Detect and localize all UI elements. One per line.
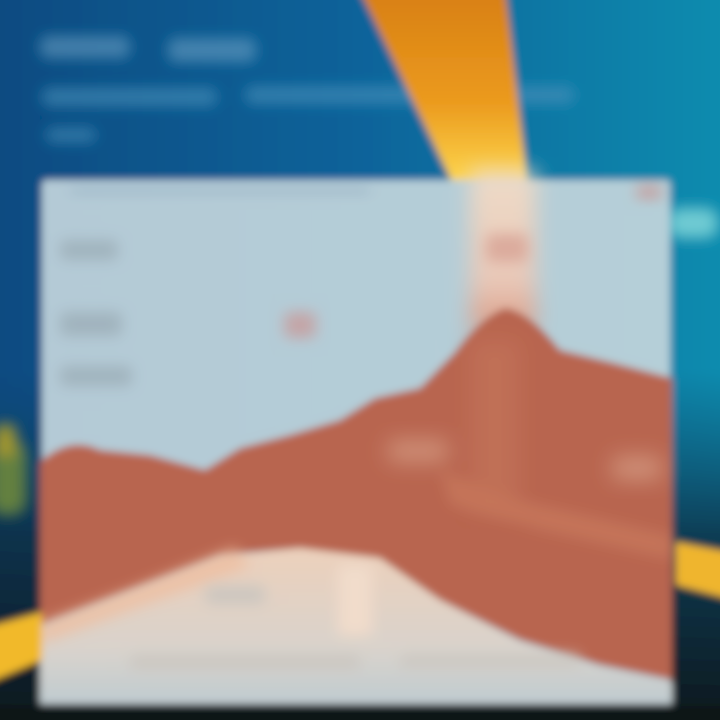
pale highlight in lower area [338,565,372,635]
subheading placeholder: blurred text lines [42,86,575,142]
panel shadow along bottom edge [0,706,720,720]
yellow ribbon: right [676,542,720,604]
yellow ribbon: left [0,612,42,690]
red area chart [40,308,672,680]
peach ridge along lower area [40,548,250,644]
column label placeholder [486,234,528,262]
panel top-line text placeholder [70,186,370,196]
red area label placeholders [388,440,662,480]
left edge green and yellow accent [0,425,26,515]
panel corner marker [636,184,662,200]
panel background [42,180,670,704]
orange light beam [350,0,528,190]
vertical ridge glow [470,340,520,510]
central red callout mark [284,312,316,338]
pale lower area [40,548,672,704]
heading placeholder: blurred title text [40,36,256,62]
lighter band in red area [440,470,672,560]
lower area label placeholders [130,586,580,669]
vertical light column [470,170,536,330]
right edge background glow [668,208,718,238]
panel: main chart card [40,170,672,704]
left label placeholders [60,240,132,386]
